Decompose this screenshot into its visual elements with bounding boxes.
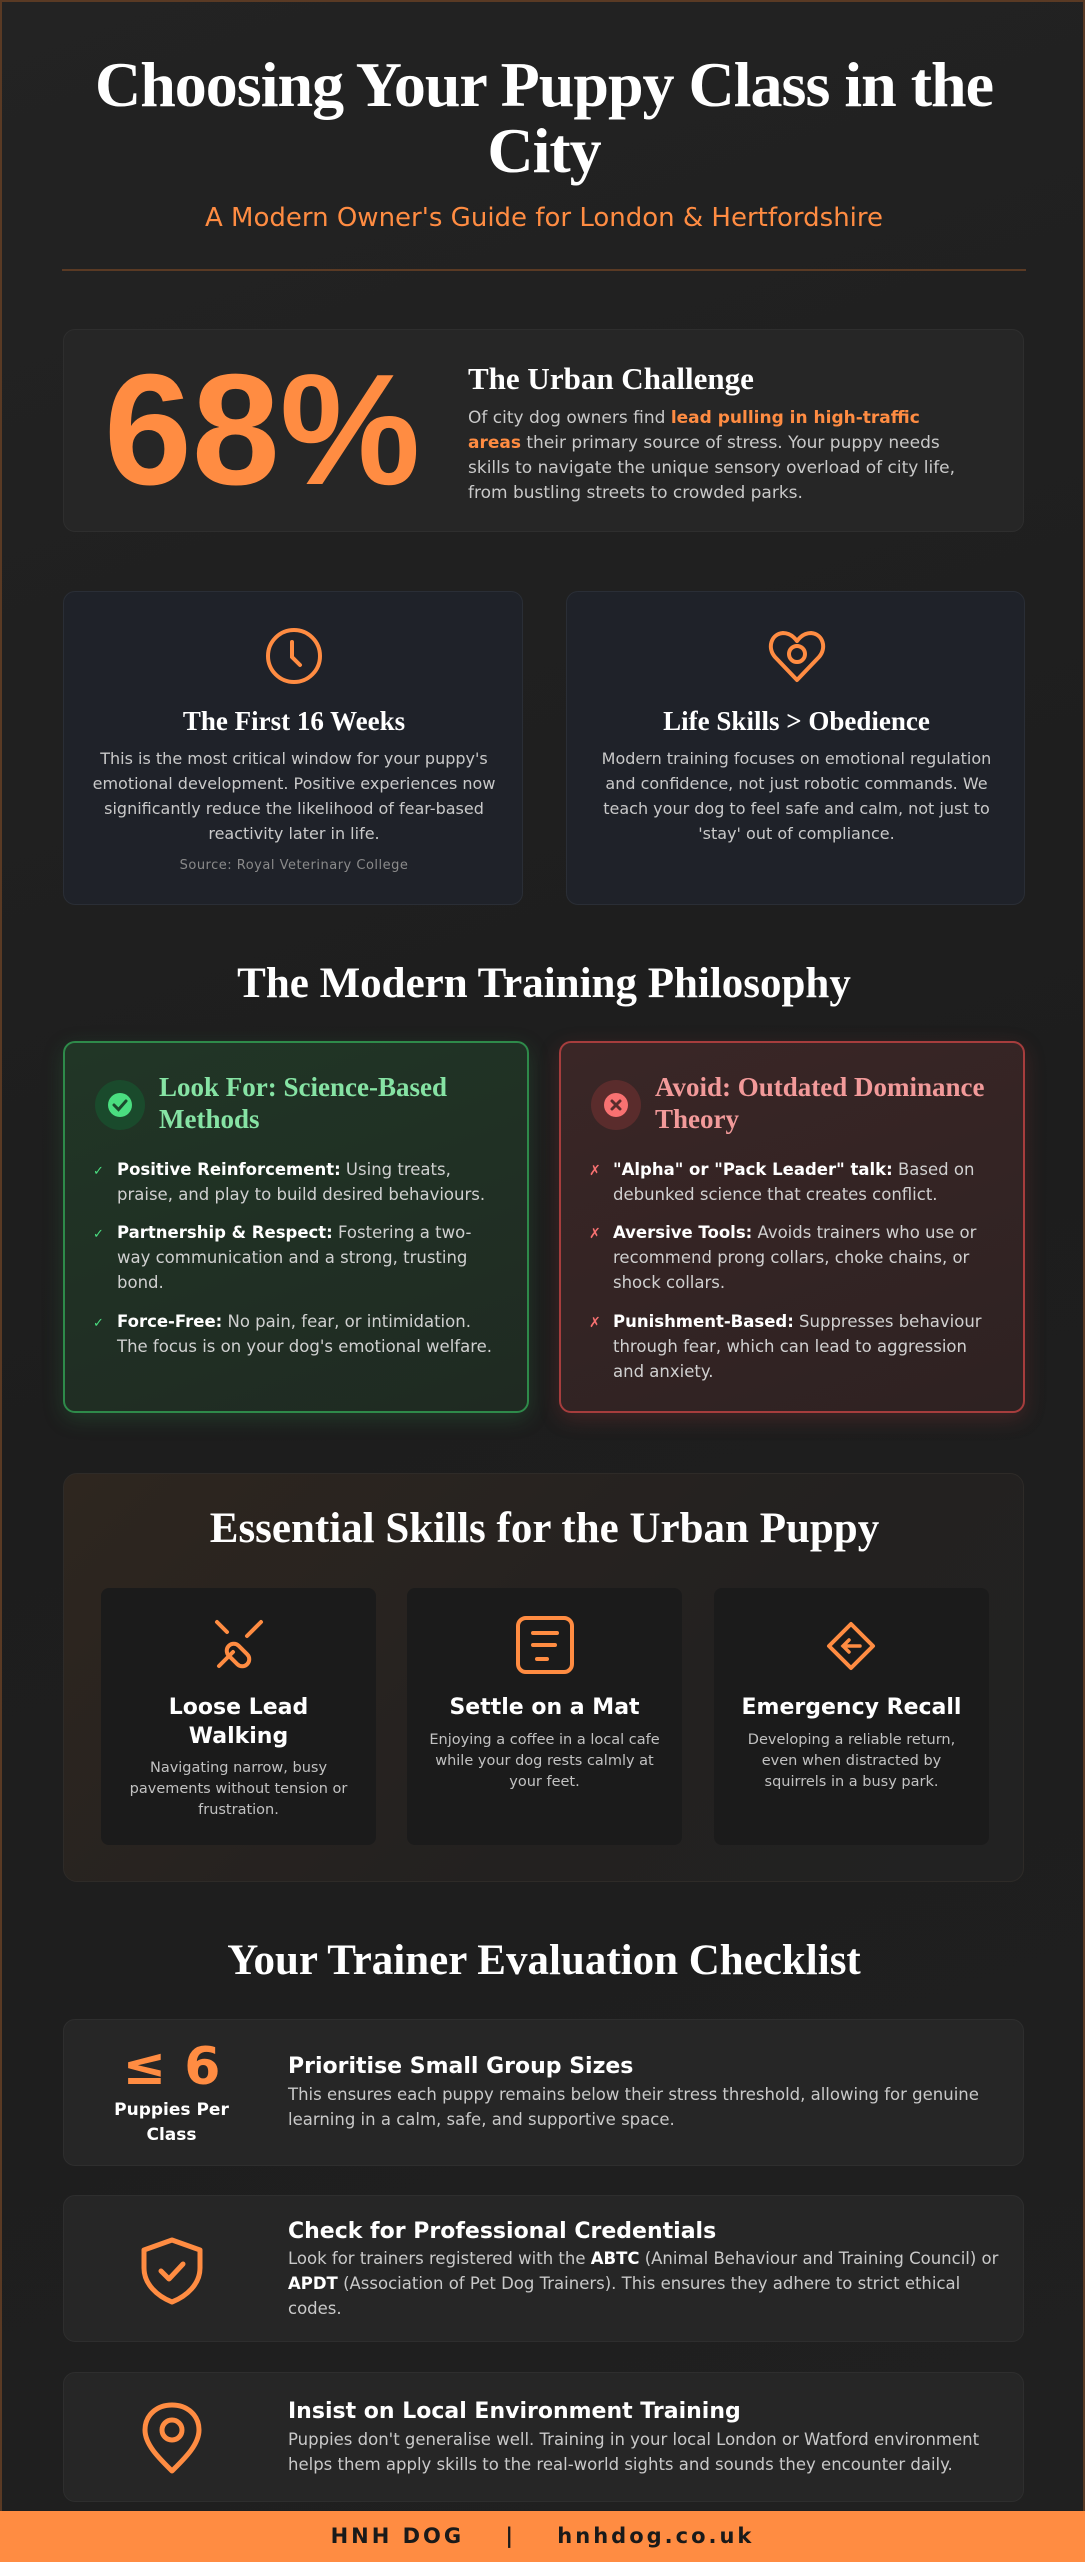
list: avoid items: ✗ (589, 1163, 601, 1179)
stat: <= 6: ≤ 6 (123, 2037, 220, 2097)
footer (0, 2511, 1085, 2562)
list: avoid items: ✗ (589, 1315, 601, 1331)
big stat 68%: 68% (104, 342, 420, 518)
heading: Walking (189, 1724, 288, 1749)
heading: modern training philosophy: The Modern Training Philosophy (237, 960, 851, 1007)
text: urban challenge body: Of city dog owners find lead pulling in high-traffic areas their primary source of stress. Your puppy needs skills to navigate the unique sensory overload of city life, from bustling streets to crowded parks. (468, 408, 955, 503)
heading: Emergency Recall (742, 1695, 961, 1720)
text: Developing a reliable return, even when distracted by squirrels in a busy park. (748, 1732, 955, 1790)
icon: clock (266, 628, 322, 684)
checklist item: local training (63, 2372, 1024, 2502)
skill card: loose lead (101, 1588, 376, 1845)
heading: Settle on a Mat (449, 1695, 640, 1720)
stat: <= 6 (114, 2037, 229, 2145)
heading: Look For: Science-Based Methods (159, 1072, 447, 1134)
icon: mat (516, 1616, 574, 1674)
text: Modern training focuses on emotional regulation and confidence, not just robotic commands. We teach your dog to feel safe and calm, not just to 'stay' out of compliance. (602, 749, 991, 843)
icon: lead (214, 1620, 264, 1668)
title (95, 49, 993, 186)
list: good methods: Force-Free: No pain, fear, or intimidation. The focus is on your dog's emotional welfare. (117, 1312, 492, 1356)
stat: <= 6: Puppies Per (114, 2100, 229, 2120)
heading: Insist on Local Environment Training (288, 2399, 741, 2424)
heading: The First 16 Weeks (183, 706, 405, 736)
text: Navigating narrow, busy pavements without tension or frustration. (130, 1760, 347, 1818)
text: This ensures each puppy remains below their stress threshold, allowing for genuine learning in a calm, safe, and supportive space. (288, 2085, 979, 2129)
heading: Life Skills > Obedience (663, 706, 930, 736)
list: avoid items: Aversive Tools: Avoids trainers who use or recommend prong collars, choke chains, or shock collars. (613, 1223, 976, 1292)
panel: life skills (566, 591, 1025, 905)
text: Enjoying a coffee in a local cafe while your dog rests calmly at your feet. (429, 1732, 660, 1790)
title: City (487, 115, 601, 186)
icon: shield (142, 2238, 202, 2304)
list: avoid items: "Alpha" or "Pack Leader" talk: Based on debunked science that creates conflict. (613, 1160, 974, 1204)
heading: Essential Skills for the Urban Puppy (210, 1505, 879, 1552)
list: good methods: ✓ (93, 1227, 104, 1242)
icon: diamond arrow (826, 1622, 876, 1670)
subtitle: A Modern Owner's Guide for London & Hertfordshire (205, 203, 883, 233)
icon: map pin (142, 2402, 202, 2474)
panel: first 16 weeks (63, 591, 523, 905)
source: Source: Royal Veterinary College (180, 858, 408, 873)
text: Puppies don't generalise well. Training in your local London or Watford environment helps them apply skills to the real-world sights and sounds they encounter daily. (288, 2430, 979, 2474)
list: good methods: Partnership & Respect: Fostering a two-way communication and a strong, trusting bond. (117, 1223, 471, 1292)
footer: HNH DOG | hnhdog.co.uk (331, 2524, 754, 2548)
list: avoid items: ✗ (589, 1226, 601, 1242)
list: avoid items: Punishment-Based: Suppresses behaviour through fear, which can lead to aggression and anxiety. (613, 1312, 982, 1381)
heading: checklist: Your Trainer Evaluation Checklist (227, 1937, 861, 1984)
text: Look for trainers registered with the ABTC (Animal Behaviour and Training Council) or APDT (Association of Pet Dog Trainers). This ensures they adhere to strict ethical codes. (288, 2249, 998, 2318)
list: good methods (93, 1160, 492, 1356)
title: Choosing Your Puppy Class in the (95, 49, 993, 120)
icon: heart (768, 631, 826, 682)
skill card: recall (714, 1588, 989, 1845)
panel: avoid (559, 1041, 1025, 1413)
heading: Loose Lead (169, 1695, 308, 1720)
heading: Check for Professional Credentials (288, 2219, 716, 2244)
heading: urban challenge: The Urban Challenge (468, 361, 754, 396)
checklist item: group sizes (63, 2019, 1024, 2166)
stat: <= 6: Class (146, 2125, 196, 2145)
list: avoid items (589, 1160, 982, 1381)
panel: look for (63, 1041, 529, 1413)
panel: essential skills (63, 1473, 1024, 1882)
heading: Prioritise Small Group Sizes (288, 2054, 633, 2079)
list: good methods: Positive Reinforcement: Using treats, praise, and play to build desired behaviours. (117, 1160, 485, 1204)
heading (169, 1695, 308, 1749)
checklist item: credentials (63, 2195, 1024, 2342)
text: This is the most critical window for your puppy's emotional development. Positive experiences now significantly reduce the likelihood of fear-based reactivity later in life. (93, 749, 495, 843)
skill card: settle (407, 1588, 682, 1845)
icon: x circle (591, 1080, 641, 1130)
panel: urban challenge stat (63, 329, 1024, 532)
heading: Avoid: Outdated Dominance Theory (655, 1072, 985, 1134)
list: good methods: ✓ (93, 1316, 104, 1331)
list: good methods: ✓ (93, 1164, 104, 1179)
icon: check circle (95, 1080, 145, 1130)
